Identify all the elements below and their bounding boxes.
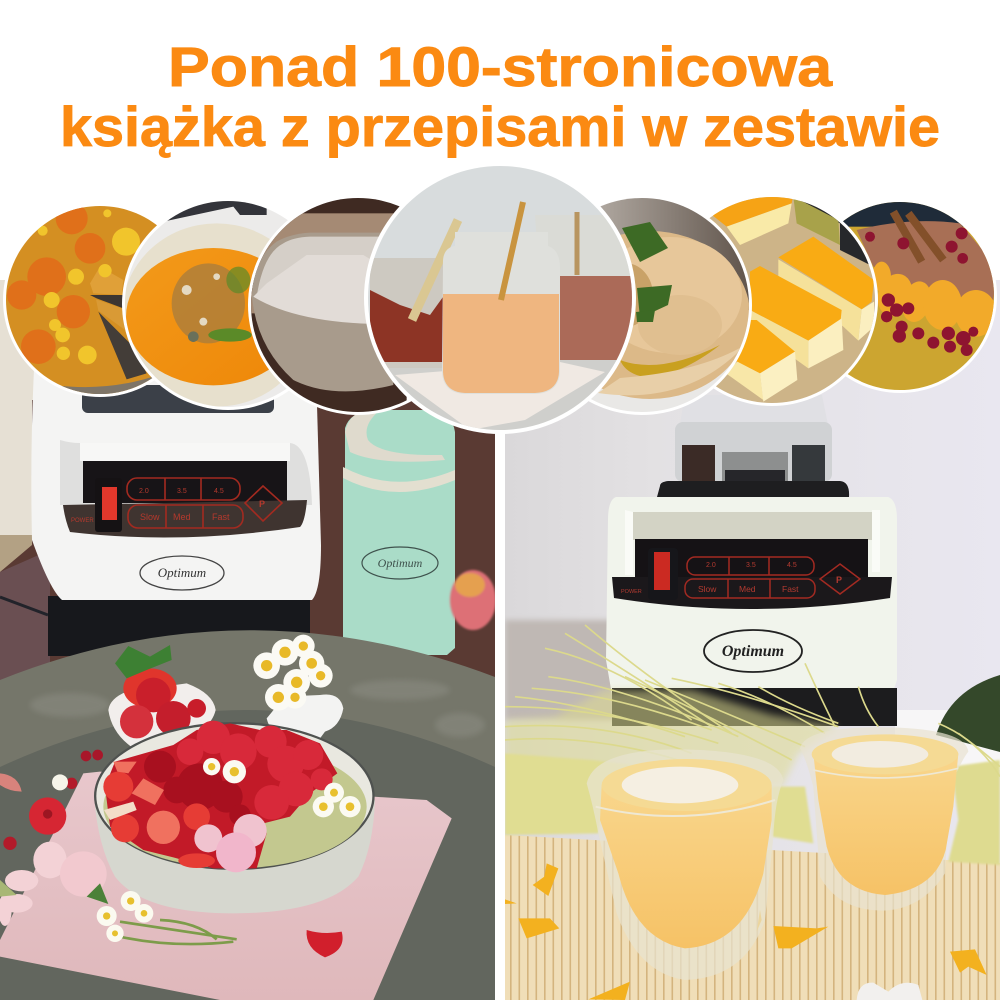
white blender	[606, 497, 897, 726]
icon: clear blender jar	[657, 422, 850, 497]
icon: white blender: POWER	[71, 518, 94, 524]
icon: white blender: Med	[173, 512, 191, 522]
mini jug with daisies	[253, 635, 343, 738]
stones	[857, 983, 922, 1000]
photo: right blender scene	[505, 280, 1000, 1000]
small raspberry bowl	[108, 645, 216, 748]
white blender: 4.5	[787, 562, 797, 569]
lower left objects in zoom coordinates	[0, 635, 452, 1000]
white blender: Med	[739, 584, 756, 594]
icon: white blender: P	[259, 499, 265, 509]
lower right objects in zoom coordinates	[505, 625, 1000, 1000]
photo: left blender scene	[0, 280, 496, 1000]
photo circle: flower cake	[3, 206, 157, 397]
white blender: POWER	[621, 589, 642, 595]
title	[60, 35, 940, 158]
pink napkin	[0, 772, 452, 1000]
photo circle: mango dessert	[843, 202, 997, 393]
photo circle: hummus	[588, 198, 752, 415]
white blender: 3.5	[746, 562, 756, 569]
white blender: Fast	[782, 584, 799, 594]
icon: dried rose	[450, 570, 496, 630]
icon: white blender: Fast	[212, 512, 230, 522]
icon: white blender: Optimum	[158, 565, 206, 580]
icon: white blender: 3.5	[177, 488, 187, 495]
icon: green thermos	[343, 410, 455, 655]
title: Ponad 100-stronicowa	[168, 35, 833, 98]
tray rim	[0, 630, 495, 767]
white blender: 2.0	[706, 562, 716, 569]
raspberries and flowers on the tray and napkin	[0, 750, 343, 957]
white blender: P	[836, 575, 842, 585]
photo circle: orange soup	[122, 201, 288, 410]
dried grass	[505, 625, 1000, 865]
photo circle: cheesecake	[710, 197, 878, 406]
petals	[505, 863, 987, 1000]
bamboo mat	[505, 835, 1000, 1000]
photo circle: jar of smoothie	[364, 162, 636, 435]
icon: white blender: Slow	[140, 512, 160, 522]
icon: white blender: 4.5	[214, 488, 224, 495]
glass left	[587, 749, 783, 980]
glass right	[800, 727, 968, 911]
fruit mound	[105, 723, 337, 868]
table surface	[0, 400, 495, 700]
icon: mango	[936, 675, 1000, 752]
tray floor	[0, 710, 495, 1000]
icon: green thermos: Optimum	[378, 556, 423, 570]
icon: white blender	[31, 370, 321, 656]
photo circle: flour bowl	[248, 198, 412, 415]
icon: white blender: 2.0	[139, 488, 149, 495]
smoothie bowl	[94, 721, 375, 913]
title: książka z przepisami w zestawie	[60, 95, 940, 158]
white blender: Optimum	[722, 643, 784, 660]
white blender: Slow	[698, 584, 717, 594]
